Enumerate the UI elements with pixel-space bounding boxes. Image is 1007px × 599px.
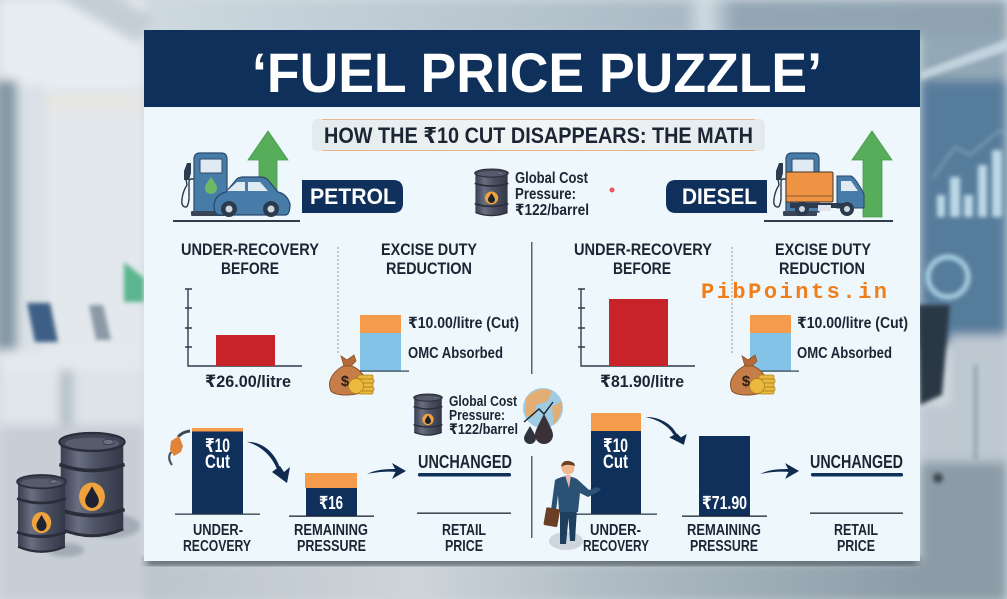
- bar chart: diesel 81.90: [578, 289, 695, 366]
- heading: BEFORE: [221, 259, 279, 278]
- axis labels: RETAIL: [442, 522, 486, 539]
- text: global cost: ₹122/barrel: [449, 422, 518, 438]
- icon: green up arrow: [248, 131, 288, 195]
- icon: businessman: [543, 461, 601, 550]
- section: diesel excise duty reduction: [730, 240, 908, 395]
- value label: ₹81.90/litre: [600, 372, 684, 391]
- subtitle banner: HOW THE ₹10 CUT DISAPPEARS: THE MATH: [324, 123, 753, 148]
- axis labels: RECOVERY: [183, 538, 251, 555]
- axis labels: [583, 522, 878, 555]
- legend labels: [797, 315, 908, 362]
- retail price unchanged: [417, 452, 512, 514]
- legend labels: OMC Absorbed: [408, 345, 503, 362]
- heading: [775, 240, 872, 278]
- axis labels: RECOVERY: [583, 538, 649, 555]
- badge: diesel: DIESEL: [682, 184, 757, 209]
- section: petrol flow: [169, 428, 512, 555]
- axis labels: PRICE: [837, 538, 875, 555]
- axis labels: PRESSURE: [297, 538, 366, 555]
- arrow: [645, 417, 687, 445]
- axis labels: UNDER-: [590, 522, 641, 539]
- arrow: [367, 463, 406, 479]
- axis labels: [183, 522, 486, 555]
- value label: ₹26.00/litre: [205, 372, 291, 391]
- bar: under-recovery: [575, 413, 657, 515]
- section: petrol excise duty reduction: [330, 240, 519, 395]
- section: diesel flow: [543, 413, 903, 555]
- bar: under-recovery: [175, 428, 260, 515]
- bar: under-recovery: Cut: [603, 452, 629, 473]
- legend labels: [408, 315, 519, 362]
- bar: under-recovery: ₹10: [603, 436, 628, 457]
- title: ‘FUEL PRICE PUZZLE’: [252, 41, 822, 104]
- legend labels: ₹10.00/litre (Cut): [797, 315, 908, 332]
- axis labels: REMAINING: [294, 522, 368, 539]
- legend labels: OMC Absorbed: [797, 345, 892, 362]
- heading: EXCISE DUTY: [775, 240, 872, 259]
- petrol heading group: [173, 131, 403, 222]
- stacked bar: [750, 315, 799, 372]
- icon: money bag: [330, 355, 374, 395]
- icon: fuel pump: [774, 153, 819, 216]
- panel: infographic card: [144, 30, 920, 561]
- text: global cost: ₹122/barrel: [515, 202, 589, 219]
- heading: BEFORE: [613, 259, 671, 278]
- section: diesel under-recovery before: [574, 240, 713, 391]
- bar: under-recovery: ₹10: [205, 436, 230, 457]
- section: petrol under-recovery before: [181, 240, 320, 391]
- retail price unchanged: [810, 452, 903, 514]
- stacked bar: [360, 315, 409, 372]
- bar: remaining pressure: ₹71.90: [702, 493, 747, 513]
- axis labels: PRESSURE: [690, 538, 758, 555]
- badge: diesel: [666, 180, 767, 213]
- axis labels: RETAIL: [834, 522, 878, 539]
- icon: barrel: [414, 394, 442, 435]
- watermark: PibPoints.in: PibPoints.in: [701, 280, 887, 305]
- heading: UNDER-RECOVERY: [181, 240, 320, 259]
- icon: truck: [786, 172, 864, 216]
- heading: REDUCTION: [779, 259, 865, 278]
- icon: fuel pump: [182, 153, 227, 216]
- big oil barrels: [17, 433, 140, 557]
- axis labels: PRICE: [445, 538, 483, 555]
- heading: UNDER-RECOVERY: [574, 240, 713, 259]
- retail price unchanged: UNCHANGED: [418, 452, 512, 472]
- badge: petrol: PETROL: [310, 184, 396, 209]
- axis labels: REMAINING: [687, 522, 761, 539]
- legend labels: ₹10.00/litre (Cut): [408, 315, 519, 332]
- global cost pressure top: [475, 169, 589, 219]
- bar: remaining pressure: ₹16: [319, 493, 343, 513]
- global cost pressure middle: [414, 388, 563, 444]
- text: global cost: Global Cost: [515, 170, 588, 187]
- icon: globe with oil drops: [523, 388, 563, 444]
- text: global cost: [515, 170, 589, 219]
- icon: car: [214, 177, 290, 217]
- heading: EXCISE DUTY: [381, 240, 478, 259]
- heading: [574, 240, 713, 278]
- header band: [144, 30, 920, 107]
- icon: money bag: [730, 355, 775, 395]
- bar: remaining pressure: [682, 436, 767, 517]
- heading: [181, 240, 320, 278]
- text: global cost: Global Cost: [449, 394, 517, 410]
- icon: green up arrow: [852, 131, 892, 217]
- heading: [381, 240, 478, 278]
- diesel heading group: [666, 131, 893, 222]
- axis labels: UNDER-: [193, 522, 243, 539]
- heading: REDUCTION: [386, 259, 472, 278]
- arrow: [760, 463, 799, 479]
- arrow: [247, 442, 290, 483]
- icon: barrel: [475, 169, 508, 216]
- icon: fuel nozzle: [169, 431, 190, 465]
- text: global cost: Pressure:: [449, 408, 505, 424]
- text: global cost: [449, 394, 518, 438]
- badge: petrol: [302, 180, 403, 213]
- text: global cost: Pressure:: [515, 186, 576, 203]
- bar: remaining pressure: [289, 473, 374, 517]
- bar chart: petrol 26.00: [185, 289, 302, 366]
- retail price unchanged: UNCHANGED: [810, 452, 903, 472]
- bar: under-recovery: Cut: [205, 452, 231, 473]
